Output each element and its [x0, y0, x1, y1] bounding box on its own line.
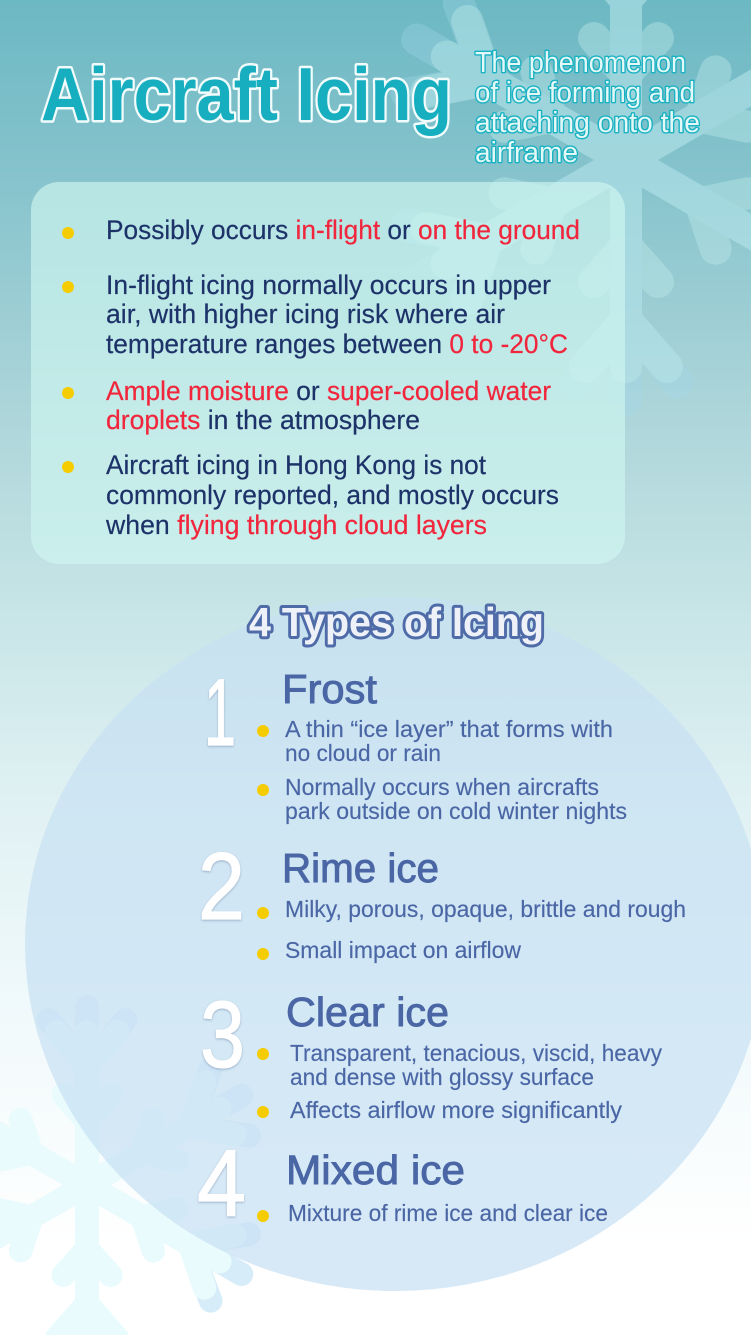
subtitle: definition	[475, 47, 700, 169]
type 3: clear ice: 3	[200, 982, 245, 1088]
type 2: rime ice: 2	[198, 834, 245, 940]
subtitle: definition: of ice forming and	[475, 77, 695, 109]
type 1: frost: 1	[204, 660, 236, 766]
type 2: rime ice: Small impact on airflow	[285, 937, 522, 963]
type 3: clear ice: Affects airflow more significantly	[290, 1097, 622, 1123]
type 1: frost	[204, 660, 627, 824]
text block: conditions: Ample moisture or super-cooled water	[106, 376, 551, 406]
text block: conditions: In-flight icing normally occurs in upper	[106, 270, 551, 300]
type 4: mixed ice: Mixed ice	[286, 1147, 465, 1193]
panel: icing conditions	[31, 182, 625, 564]
type 2: rime ice	[198, 834, 686, 963]
text block: conditions: air, with higher icing risk where air	[106, 299, 505, 329]
type 4: mixed ice: 4	[197, 1131, 246, 1237]
bullets: conditions	[62, 227, 74, 473]
text block: conditions: when flying through cloud layers	[105, 510, 487, 540]
type 2: rime ice: Rime ice	[282, 845, 439, 891]
text block: conditions: commonly reported, and mostly occurs	[106, 480, 559, 510]
type 1: frost: Frost	[282, 666, 378, 712]
type 1: frost: no cloud or rain	[285, 740, 441, 766]
panel: types circle	[25, 597, 751, 1291]
type 4: mixed ice: Mixture of rime ice and clear ice	[288, 1200, 608, 1226]
type 3: clear ice: Clear ice	[286, 989, 449, 1035]
type 1: frost: park outside on cold winter nights	[285, 798, 627, 824]
type 1: frost: A thin “ice layer” that forms with	[285, 716, 613, 742]
subtitle: definition: attaching onto the	[475, 107, 700, 139]
type 3: clear ice: and dense with glossy surface	[290, 1064, 594, 1090]
subtitle: definition: airframe	[475, 137, 578, 169]
type 3: clear ice: Transparent, tenacious, viscid, heavy	[290, 1040, 662, 1066]
text block: conditions: droplets in the atmosphere	[106, 405, 420, 435]
icon: large snowflake top right	[391, 0, 751, 401]
subtitle: definition: The phenomenon	[475, 47, 686, 79]
text block: conditions: temperature ranges between 0 to -20°C	[106, 329, 568, 359]
type 2: rime ice: Milky, porous, opaque, brittle and rough	[285, 896, 686, 922]
text block: conditions: Possibly occurs in-flight or on the ground	[106, 215, 580, 245]
title: Aircraft Icing	[41, 52, 452, 136]
heading: 4 types of icing: 4 Types of Icing	[249, 599, 544, 645]
icon: snowflake bottom left	[0, 1007, 261, 1335]
type 4: mixed ice	[197, 1131, 608, 1237]
type 3: clear ice	[200, 982, 662, 1123]
text block: conditions: Aircraft icing in Hong Kong is not	[106, 450, 487, 480]
text block: conditions	[105, 215, 580, 540]
type 1: frost: Normally occurs when aircrafts	[285, 774, 599, 800]
